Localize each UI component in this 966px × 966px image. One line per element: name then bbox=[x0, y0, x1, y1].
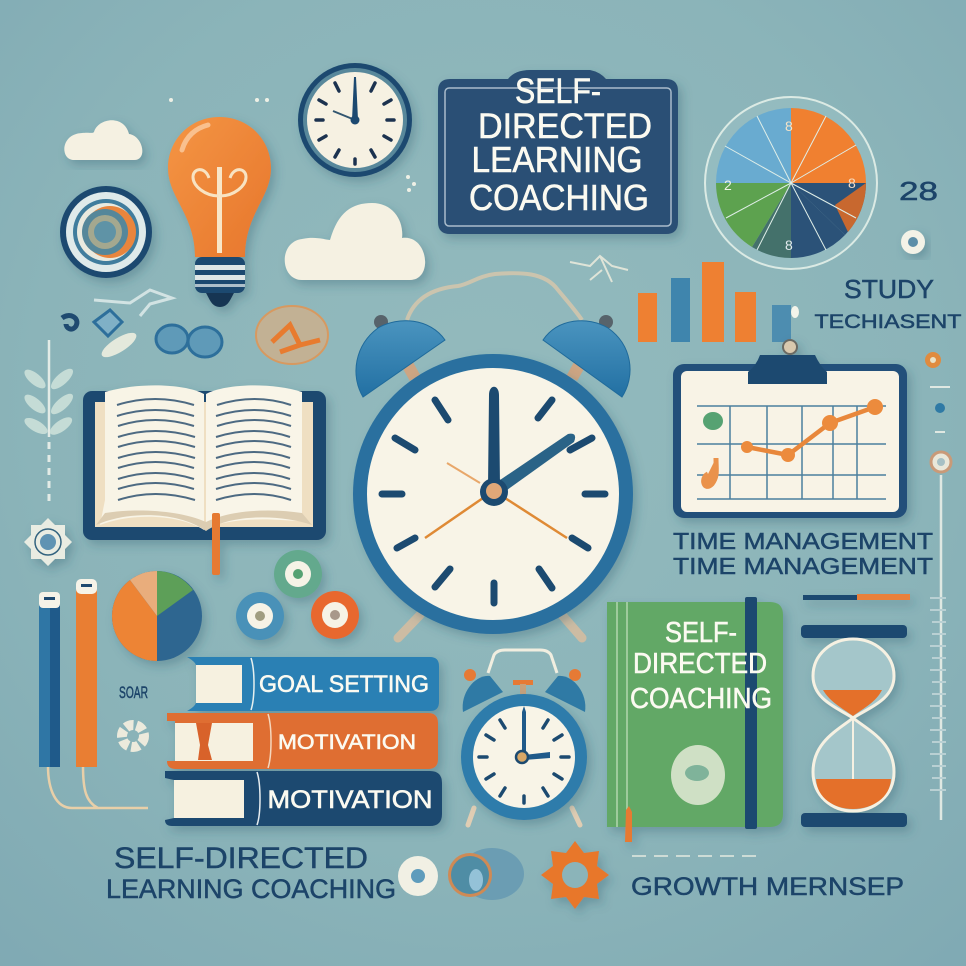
small alarm clock bbox=[461, 650, 587, 825]
faint dash row bbox=[632, 855, 757, 857]
title sign: SELF- bbox=[515, 72, 601, 111]
book: goal setting: GOAL SETTING bbox=[259, 671, 429, 698]
book: goal setting bbox=[187, 657, 439, 711]
icon: orange gear bbox=[541, 841, 609, 909]
title sign: DIRECTED bbox=[478, 107, 652, 146]
bottom left caption: LEARNING COACHING bbox=[106, 874, 396, 904]
icon: small flower gear bbox=[122, 725, 144, 747]
green notebook: COACHING bbox=[630, 683, 772, 715]
icon: orange glass blob bbox=[256, 306, 328, 364]
hourglass bbox=[801, 594, 910, 827]
green notebook: SELF- bbox=[665, 617, 737, 649]
green notebook bbox=[607, 597, 783, 842]
alarm clock large bbox=[353, 273, 633, 638]
book stack bbox=[165, 657, 442, 826]
bottom left caption: SELF-DIRECTED bbox=[114, 842, 368, 875]
icon: light bulb bbox=[168, 117, 271, 307]
title sign bbox=[438, 70, 678, 234]
time management labels: TIME MANAGEMENT bbox=[673, 553, 933, 579]
large cloud bbox=[285, 203, 425, 280]
icon: small discs bbox=[236, 550, 359, 640]
book: motivation orange: MOTIVATION bbox=[278, 731, 416, 754]
pie chart bbox=[112, 571, 202, 661]
title sign: COACHING bbox=[469, 177, 649, 218]
study techniques label: STUDY bbox=[844, 274, 934, 304]
growth mindset label: GROWTH MERNSEP bbox=[631, 873, 904, 901]
book: motivation navy bbox=[165, 771, 442, 826]
green notebook: DIRECTED bbox=[633, 648, 767, 680]
icon: target circles bbox=[60, 186, 152, 278]
pens bbox=[39, 579, 148, 808]
pie dial chart: 8 bbox=[848, 175, 856, 191]
title sign: LEARNING bbox=[472, 139, 642, 180]
bar chart bbox=[638, 262, 799, 342]
bottom left caption bbox=[106, 842, 396, 904]
time management labels: TIME MANAGEMENT bbox=[673, 528, 933, 554]
icon: small ring bbox=[901, 230, 925, 254]
time management labels bbox=[673, 528, 933, 579]
clipboard chart bbox=[673, 340, 907, 518]
number 28: 28 bbox=[899, 176, 938, 206]
pie dial chart: 2 bbox=[724, 177, 732, 193]
icon: small cloud bbox=[64, 120, 142, 160]
right thin marker line bbox=[925, 352, 951, 820]
small soar label: SOAR bbox=[119, 683, 148, 702]
decorative sketch marks bbox=[62, 256, 628, 362]
icon: lens discs bbox=[398, 848, 524, 900]
study techniques label bbox=[814, 274, 962, 333]
book: motivation navy: MOTIVATION bbox=[268, 786, 432, 814]
icon: open book bbox=[83, 385, 326, 575]
pie dial chart bbox=[705, 97, 877, 269]
decorative specks bbox=[169, 98, 416, 192]
pie dial chart: 8 bbox=[785, 237, 793, 253]
book: motivation orange bbox=[167, 713, 438, 769]
icon: plant sprig bbox=[22, 340, 76, 505]
icon: gear bbox=[24, 518, 72, 566]
study techniques label: TECHIASENT bbox=[814, 312, 962, 333]
pie dial chart: 8 bbox=[785, 118, 793, 134]
icon: top wall clock bbox=[298, 63, 412, 177]
